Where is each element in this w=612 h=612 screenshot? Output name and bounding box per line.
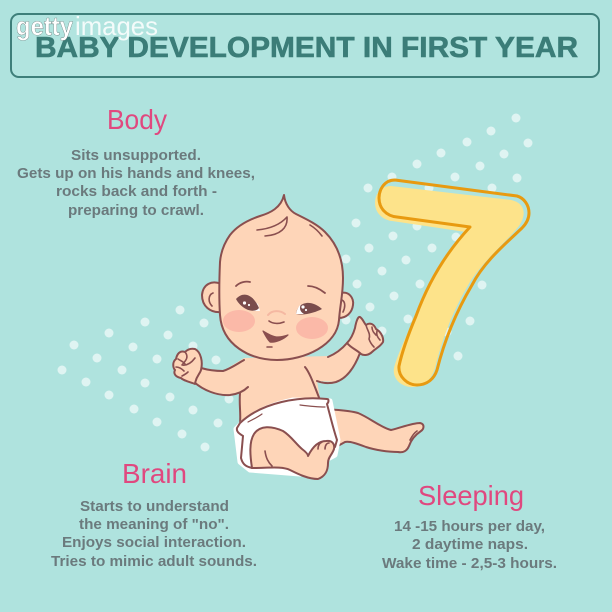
watermark <box>16 11 158 41</box>
left fingers <box>176 352 195 376</box>
left fist <box>173 349 202 384</box>
heading: body: Body <box>107 104 167 135</box>
foot toes and knee <box>265 431 417 466</box>
left eye <box>236 295 260 311</box>
text: brain description: Tries to mimic adult sounds. <box>51 553 257 570</box>
right leg <box>326 409 424 452</box>
hair curl <box>209 217 345 312</box>
text: body description: Sits unsupported. <box>71 147 201 164</box>
eyebrows <box>236 282 325 293</box>
chin mark <box>267 346 272 348</box>
torso and arm outlines <box>194 343 360 423</box>
watermark: images <box>75 11 158 41</box>
heading: brain: Brain <box>122 458 187 489</box>
heading: sleeping: Sleeping <box>418 480 524 511</box>
dots: upper right <box>342 114 532 360</box>
right eye <box>296 303 322 315</box>
dots: lower left <box>58 306 234 452</box>
text: body description: preparing to crawl. <box>68 202 204 219</box>
diaper waistband <box>237 398 337 468</box>
text: brain description <box>51 498 257 570</box>
text: body description <box>17 147 255 219</box>
right ear <box>339 293 353 318</box>
baby illustration <box>173 195 424 479</box>
text: brain description: the meaning of "no". <box>79 516 229 533</box>
panel: body <box>17 104 255 219</box>
panel: brain <box>51 458 257 570</box>
right fingers <box>366 325 380 347</box>
text: body description: Gets up on his hands and knees, <box>17 165 255 182</box>
nose <box>268 311 285 315</box>
watermark: getty <box>16 11 73 41</box>
title: BABY DEVELOPMENT IN FIRST YEAR <box>35 32 578 64</box>
text: sleeping description: 2 daytime naps. <box>412 536 528 553</box>
text: sleeping description: Wake time - 2,5-3 hours. <box>382 555 557 572</box>
mouth <box>263 331 288 342</box>
bent leg <box>250 427 334 479</box>
text: sleeping description: 14 -15 hours per day, <box>394 518 545 535</box>
head <box>219 195 343 360</box>
number seven <box>375 180 529 387</box>
text: sleeping description <box>382 518 557 572</box>
right fist <box>347 317 383 355</box>
diaper creases <box>248 405 325 422</box>
left ear <box>202 282 221 312</box>
cheeks <box>223 310 328 339</box>
text: brain description: Starts to understand <box>80 498 229 515</box>
text: brain description: Enjoys social interaction. <box>62 534 246 551</box>
title panel <box>11 14 599 77</box>
nose shadow line <box>269 321 284 323</box>
text: body description: rocks back and forth - <box>56 183 217 200</box>
diaper <box>237 398 337 474</box>
panel: sleeping <box>382 480 557 572</box>
diaper halo <box>236 400 338 474</box>
torso and arms fill <box>194 343 360 425</box>
